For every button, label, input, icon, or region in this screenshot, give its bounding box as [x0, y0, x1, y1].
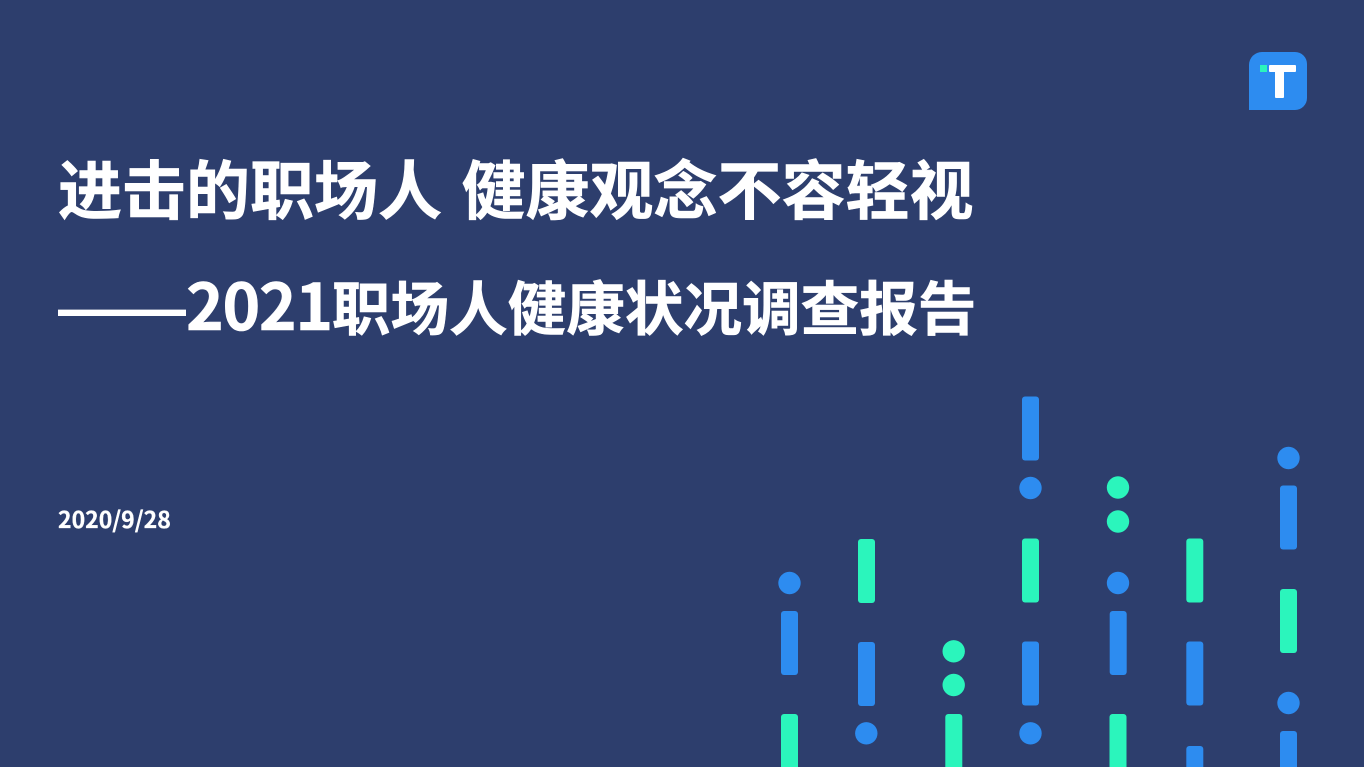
- title line 2: ——2021职场人健康状况调查报告: [58, 257, 976, 349]
- date: 2020/9/28: [58, 501, 171, 535]
- title line 1: 进击的职场人 健康观念不容轻视: [58, 141, 974, 233]
